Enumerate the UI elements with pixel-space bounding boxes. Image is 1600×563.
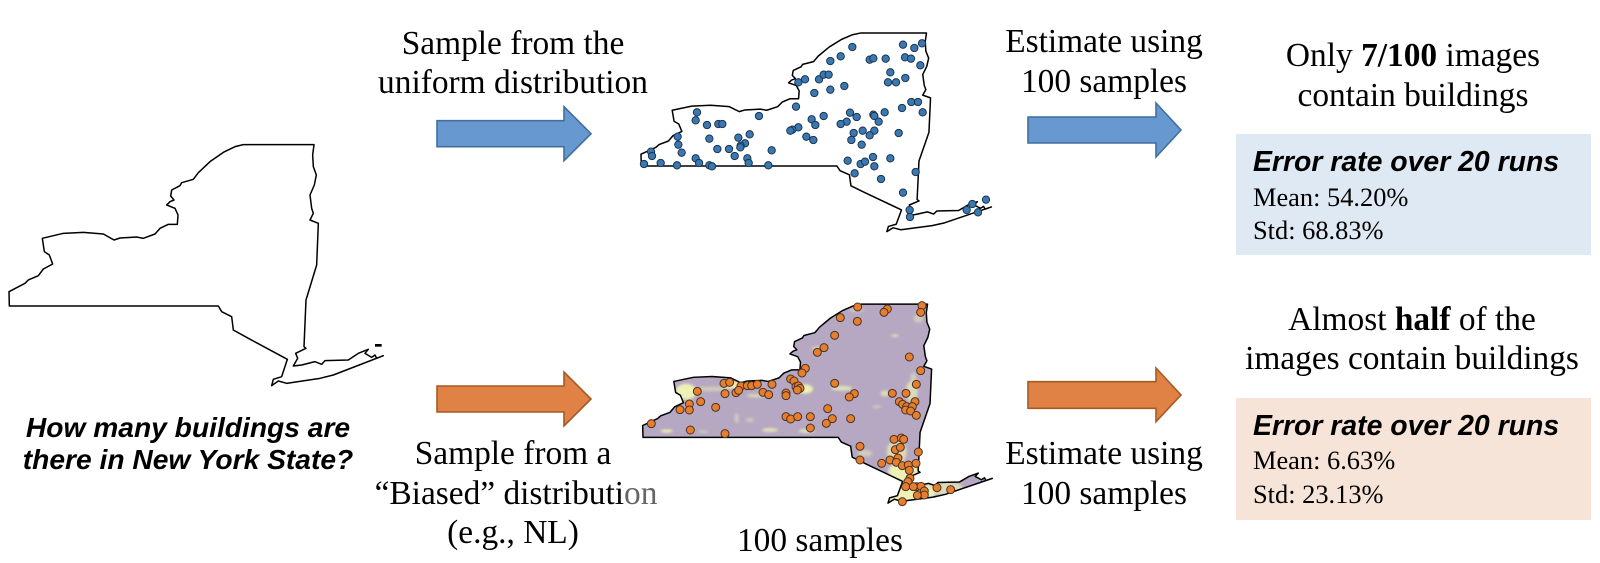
- label: estimate using 100 samples (top): 100 samples: [1021, 63, 1187, 100]
- arrow: blue estimate arrow: [1028, 103, 1181, 157]
- label: sample from uniform distribution: [378, 25, 648, 101]
- label: sample from biased distribution: Sample from a: [415, 435, 611, 472]
- panel: biased error rate: [1236, 398, 1591, 520]
- heading: almost half contain buildings: images contain buildings: [1245, 340, 1579, 377]
- panel: biased error rate: Mean: 6.63%: [1253, 445, 1395, 475]
- map: uniform sample dots: [640, 33, 991, 232]
- arrow: blue sampling arrow: [437, 107, 591, 161]
- night light raster: [643, 304, 985, 502]
- heading: only 7/100 images contain buildings: [1286, 37, 1540, 114]
- label: 100 samples under biased map: 100 samples: [737, 522, 903, 559]
- map: biased sample dots over night lights: [630, 295, 997, 508]
- panel: biased error rate: Error rate over 20 runs: [1253, 410, 1559, 442]
- arrow: orange sampling arrow: [437, 372, 591, 426]
- question caption: there in New York State?: [23, 443, 353, 475]
- label: sample from biased distribution: “Biased” distribution: [375, 475, 658, 512]
- label: estimate using 100 samples (top): Estimate using: [1005, 23, 1203, 60]
- label: sample from uniform distribution: Sample from the: [402, 25, 624, 62]
- label: sample from uniform distribution: uniform distribution: [378, 64, 648, 101]
- label: estimate using 100 samples (bottom): 100 samples: [1021, 475, 1187, 512]
- panel: uniform error rate: [1236, 134, 1591, 255]
- arrow: orange estimate arrow: [1028, 368, 1181, 422]
- heading: only 7/100 images contain buildings: contain buildings: [1298, 77, 1528, 114]
- heading: almost half contain buildings: Almost half of the: [1288, 301, 1536, 338]
- panel: biased error rate: Std: 23.13%: [1253, 479, 1384, 509]
- label: estimate using 100 samples (bottom): [1005, 435, 1203, 512]
- label: sample from biased distribution: (e.g., NL): [447, 514, 579, 551]
- label: sample from biased distribution: [375, 435, 658, 551]
- heading: only 7/100 images contain buildings: Only 7/100 images: [1286, 37, 1540, 74]
- panel: uniform error rate: Mean: 54.20%: [1253, 182, 1408, 212]
- map: blank New York State outline: [9, 145, 383, 386]
- panel: uniform error rate: Error rate over 20 runs: [1253, 146, 1559, 178]
- label: estimate using 100 samples (bottom): Estimate using: [1005, 435, 1203, 472]
- question caption: How many buildings are: [26, 411, 350, 443]
- question caption: [23, 411, 353, 475]
- panel: uniform error rate: Std: 68.83%: [1253, 215, 1384, 245]
- heading: almost half contain buildings: [1245, 301, 1579, 377]
- label: estimate using 100 samples (top): [1005, 23, 1203, 100]
